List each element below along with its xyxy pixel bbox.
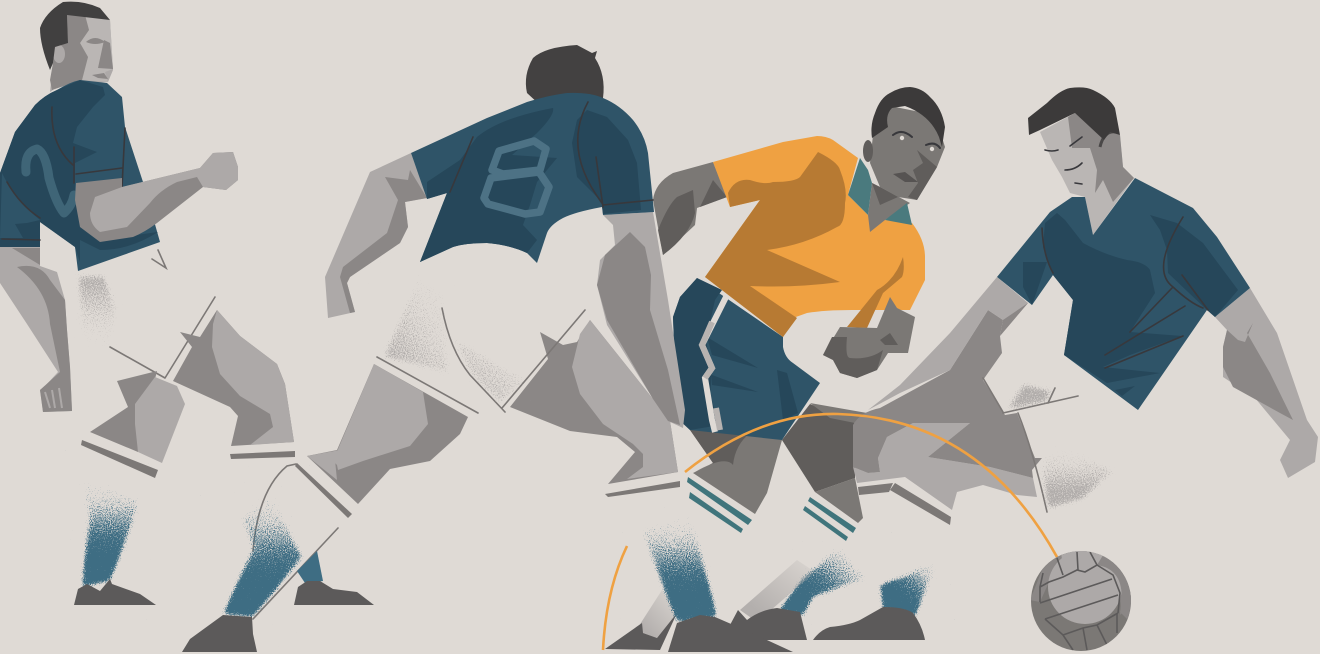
player 2 shorts speckle	[382, 275, 530, 405]
player 2 shorts lines	[253, 308, 585, 619]
player 1 shirt number	[26, 149, 74, 213]
player 2 far arm	[325, 153, 427, 318]
player 3 left leg	[690, 410, 782, 514]
player 1 head	[40, 2, 113, 92]
player 1 shorts lines	[110, 250, 215, 378]
ball	[1030, 548, 1135, 651]
player 3 fist	[823, 297, 915, 378]
player 3 far sock	[635, 590, 677, 638]
player 4 arm shadow	[1000, 303, 1028, 336]
player 4 leg shadow	[853, 310, 1042, 478]
player 4 front arm	[868, 277, 1028, 410]
player 3 head	[848, 87, 945, 232]
player 2 lower band	[605, 481, 680, 497]
player 3 shirt	[705, 136, 925, 337]
player 1 sock bands	[81, 440, 295, 478]
player 4 shirt	[997, 178, 1250, 410]
player 4 head	[1028, 87, 1134, 235]
player 2 thigh	[307, 364, 468, 504]
player 1 shirt	[0, 80, 160, 271]
player 4 back arm	[1215, 288, 1318, 478]
player 4: right	[853, 87, 1318, 525]
player 1 right arm	[75, 152, 238, 242]
player 3 back arm	[653, 162, 727, 255]
player 1 boot	[74, 579, 156, 605]
player 3: centre, orange shirt	[605, 87, 945, 650]
player 2 head	[526, 45, 604, 105]
player 4 shorts lines	[983, 378, 1078, 512]
player 2 near arm	[597, 212, 685, 428]
player 2 rear leg	[510, 320, 678, 484]
player 3 sock light	[740, 560, 815, 622]
player 3 far boot	[605, 613, 677, 650]
player 2 far sock	[297, 551, 323, 583]
player 4 bands	[858, 483, 951, 525]
player 1 lower leg	[90, 371, 185, 463]
player 3 shorts	[673, 278, 820, 440]
player 2 shirt number	[484, 141, 549, 214]
player 2 boots	[182, 581, 793, 652]
player 1 upper leg	[173, 310, 294, 446]
player 1 left arm and hand	[0, 247, 72, 412]
player 4 shorts speckle	[1005, 383, 1117, 510]
player 3 boots	[730, 607, 925, 640]
player 1 sock speckle	[80, 477, 140, 587]
player 1 shorts speckle	[77, 275, 118, 350]
orange arc lower	[603, 546, 627, 650]
player 2: centre left, number 8	[182, 45, 793, 652]
player 3 socks speckle	[778, 545, 942, 617]
player 3 sock stripes	[687, 477, 856, 541]
orange arc	[685, 414, 1057, 557]
player 2 sock speckle	[223, 490, 717, 622]
player 3 right leg	[782, 403, 867, 523]
player 2 shirt	[411, 93, 654, 263]
player 4 leg light	[853, 423, 1037, 510]
player 1: left, number 2	[0, 2, 295, 605]
player 2 thigh band	[295, 463, 352, 518]
